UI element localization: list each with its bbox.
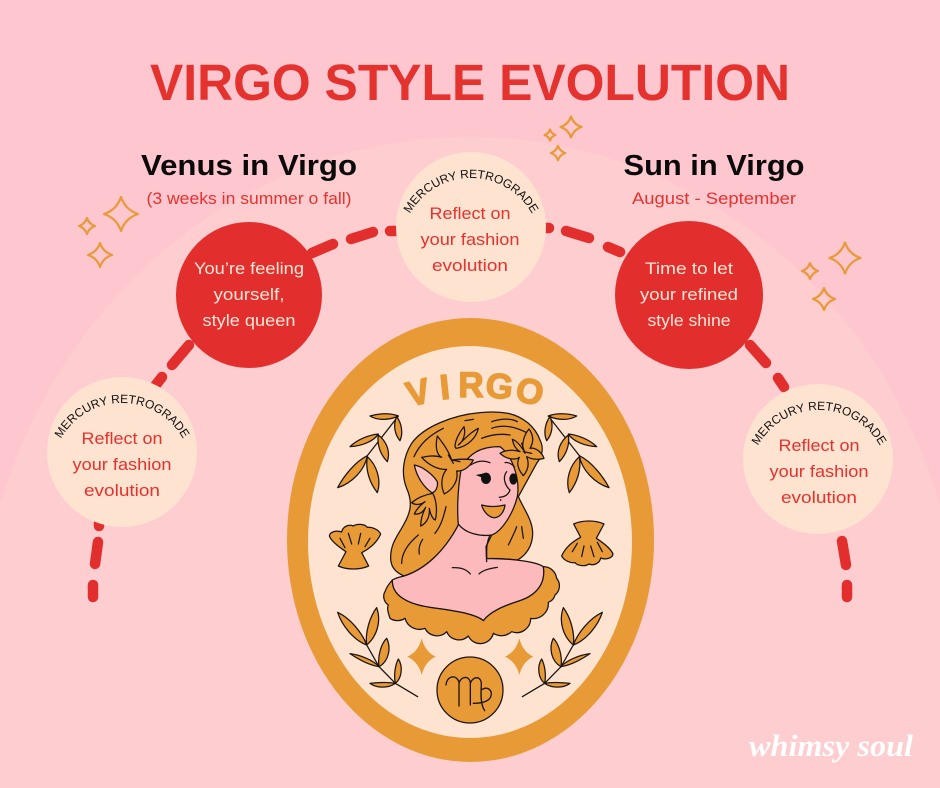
node: left mercury retrograde <box>47 377 197 527</box>
title: VIRGO STYLE EVOLUTION <box>150 54 790 111</box>
hair strands <box>402 419 527 563</box>
scalloped collar <box>384 567 559 644</box>
heading: Venus in Virgo: Venus in Virgo <box>141 150 357 182</box>
node: center mercury retrograde: your fashion <box>420 230 520 249</box>
flowers and ear <box>412 427 544 526</box>
node: left mercury retrograde: MERCURY RETROGRADE <box>54 394 190 438</box>
brand logo: whimsy soul <box>749 728 913 763</box>
node: Sun in Virgo message: your refined <box>640 285 738 304</box>
node: left mercury retrograde: Reflect on <box>82 429 162 448</box>
node: right mercury retrograde: Reflect on <box>778 436 860 455</box>
node: Venus in Virgo message <box>176 222 322 368</box>
node: Sun in Virgo message <box>615 221 763 369</box>
node: center mercury retrograde: Reflect on <box>430 204 510 223</box>
star left <box>407 638 436 675</box>
node: right mercury retrograde: your fashion <box>770 462 868 481</box>
node: center mercury retrograde <box>396 152 546 302</box>
leaf branches bottom right <box>522 608 602 697</box>
leaf branches bottom <box>338 608 418 697</box>
heading: Sun in Virgo: Sun in Virgo <box>624 150 804 182</box>
collarbone lines <box>452 567 497 574</box>
leaf branches top <box>338 414 402 493</box>
node: Sun in Virgo message: Time to let <box>645 259 733 278</box>
virgo arched label: G <box>484 366 515 408</box>
virgo arched label: I <box>438 368 452 407</box>
node: center mercury retrograde: evolution <box>432 256 508 275</box>
medallion frame <box>287 318 654 762</box>
node: Venus in Virgo message: You’re feeling <box>194 259 304 278</box>
node: left mercury retrograde: evolution <box>84 481 160 500</box>
virgo arched label: O <box>512 370 548 414</box>
sparkles: top group <box>544 116 582 160</box>
node: Venus in Virgo message: style queen <box>202 311 296 330</box>
face and body <box>392 447 544 621</box>
node: center mercury retrograde: MERCURY RETROGRADE <box>403 170 539 214</box>
sparkles: left group <box>79 197 138 267</box>
hair <box>391 412 542 576</box>
virgo arched label <box>402 366 548 415</box>
star right <box>505 638 533 675</box>
virgo medallion <box>287 318 654 762</box>
node: Sun in Virgo message: style shine <box>648 311 730 330</box>
node: right mercury retrograde <box>743 384 893 534</box>
node: right mercury retrograde: MERCURY RETROGRADE <box>751 402 887 446</box>
virgo arched label: V <box>402 371 435 415</box>
subheading: Sun dates: August - September <box>632 189 796 208</box>
shell right <box>562 521 613 566</box>
leaf branches top right <box>545 414 609 493</box>
node: right mercury retrograde: evolution <box>781 488 857 507</box>
shell left <box>329 524 381 569</box>
virgo zodiac symbol <box>437 657 503 723</box>
node: left mercury retrograde: your fashion <box>72 455 172 474</box>
subheading: Venus dates: (3 weeks in summer o fall) <box>146 189 352 208</box>
virgo arched label: R <box>458 366 484 405</box>
facial features <box>458 461 517 562</box>
sparkles: right group <box>802 242 860 310</box>
dashed timeline path <box>93 228 847 597</box>
node: Venus in Virgo message: yourself, <box>214 285 284 304</box>
